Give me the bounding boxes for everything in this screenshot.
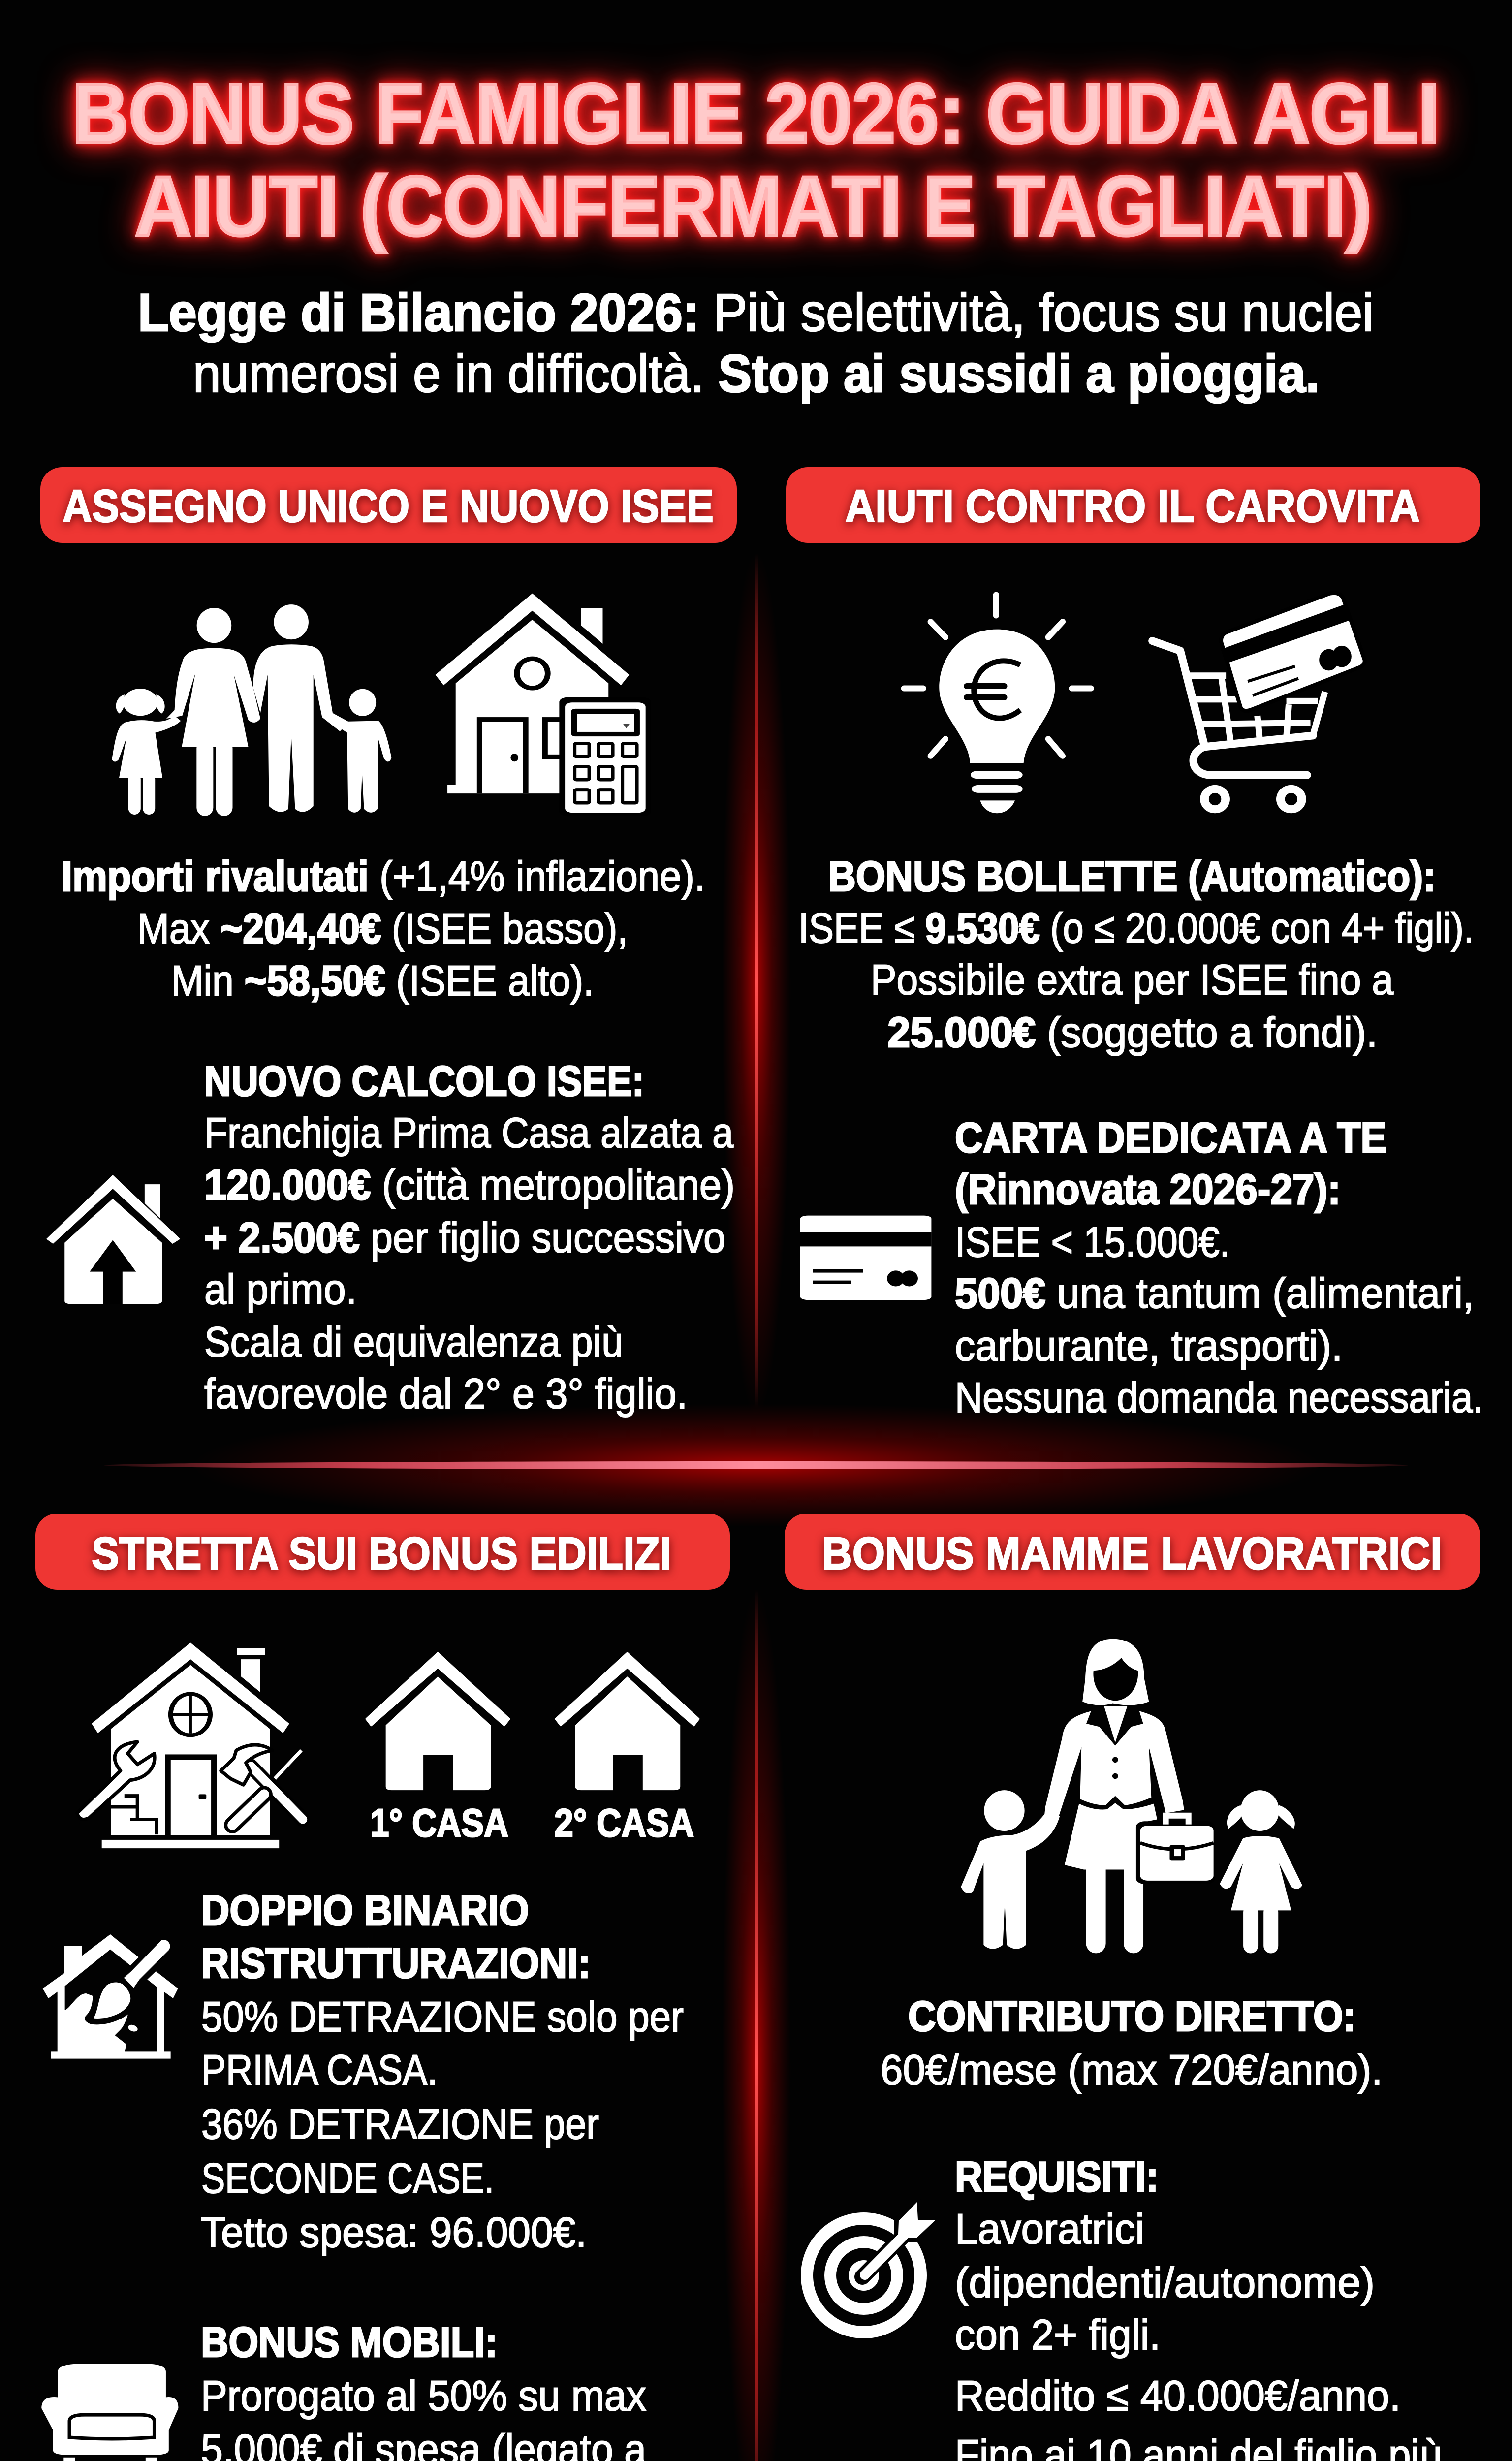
text: doppio binario ristrutturazioni: DOPPIO BINARIO: [201, 1887, 529, 1934]
text: importi rivalutati: Min ~58,50€ (ISEE alto).: [171, 957, 594, 1005]
heading: stretta sui bonus edilizi: STRETTA SUI BONUS EDILIZI: [92, 1528, 671, 1579]
text: contributo diretto: CONTRIBUTO DIRETTO:: [908, 1993, 1356, 2040]
text: bonus bollette: BONUS BOLLETTE (Automatico):: [828, 853, 1436, 900]
text: nuovo calcolo isee: + 2.500€ per figlio successivo: [204, 1214, 725, 1262]
text: bonus mobili: Prorogato al 50% su max: [201, 2372, 646, 2420]
horizontal divider middle: [104, 1404, 1408, 1527]
text: importi rivalutati: Importi rivalutati (+1,4% inflazione).: [62, 853, 705, 900]
text: nuovo calcolo isee: 120.000€ (città metropolitane): [204, 1162, 735, 1209]
text: contributo diretto: [881, 1993, 1383, 2094]
text: carta dedicata a te: CARTA DEDICATA A TE: [955, 1114, 1386, 1162]
vertical divider bottom: [722, 1590, 791, 2461]
text: requisiti: REQUISITI:: [955, 2153, 1159, 2201]
heading: assegno unico: [40, 467, 737, 543]
icon: payment card: [800, 1216, 931, 1300]
icon: house painting: [43, 1934, 178, 2059]
subtitle: numerosi e in difficoltà. Stop ai sussidi a pioggia.: [193, 344, 1320, 403]
text: nuovo calcolo isee: NUOVO CALCOLO ISEE:: [204, 1058, 644, 1105]
text: importi rivalutati: [62, 853, 705, 1005]
text: importi rivalutati: Max ~204,40€ (ISEE basso),: [137, 905, 628, 952]
text: nuovo calcolo isee: al primo.: [204, 1266, 357, 1313]
text: doppio binario ristrutturazioni: SECONDE CASE.: [201, 2155, 494, 2202]
text: nuovo calcolo isee: [204, 1058, 735, 1418]
icon: second home: [556, 1653, 698, 1790]
text: bonus mobili: BONUS MOBILI:: [201, 2319, 498, 2366]
title: AIUTI (CONFERMATI E TAGLIATI): [135, 159, 1372, 253]
label: 2° casa: 2° CASA: [554, 1801, 694, 1845]
subtitle: [138, 283, 1374, 403]
text: bonus mobili: [201, 2319, 724, 2461]
text: bonus bollette: ISEE ≤ 9.530€ (o ≤ 20.000€ con 4+ figli).: [798, 905, 1474, 952]
text: carta dedicata a te: carburante, trasporti).: [955, 1323, 1343, 1370]
vertical divider top: [722, 551, 791, 1418]
text: requisiti: [955, 2153, 1442, 2461]
heading: aiuti contro il carovita: [786, 467, 1480, 543]
icon: first home: [366, 1653, 509, 1790]
text: bonus bollette: 25.000€ (soggetto a fondi).: [887, 1009, 1378, 1056]
text: doppio binario ristrutturazioni: PRIMA CASA.: [201, 2047, 438, 2094]
panel: aiuti contro il carovita: [786, 467, 1483, 1421]
icon: shopping cart with card: [1152, 593, 1365, 813]
heading: assegno unico: ASSEGNO UNICO E NUOVO ISEE: [63, 480, 714, 532]
icon: light bulb with euro: [904, 595, 1091, 813]
text: contributo diretto: 60€/mese (max 720€/anno).: [881, 2047, 1383, 2094]
heading: bonus mamme lavoratrici: BONUS MAMME LAVORATRICI: [822, 1528, 1442, 1579]
icon: house with calculator: [436, 594, 651, 816]
heading: stretta sui bonus edilizi: [35, 1514, 730, 1590]
icon: renovation house with tools: [77, 1642, 303, 1848]
text: requisiti: Reddito ≤ 40.000€/anno.: [955, 2372, 1401, 2420]
panel: stretta sui bonus edilizi: [35, 1514, 730, 2461]
subtitle: Legge di Bilancio 2026: Più selettività, focus su nuclei: [138, 283, 1374, 342]
panel: bonus mamme lavoratrici: [785, 1514, 1480, 2461]
text: carta dedicata a te: [955, 1114, 1483, 1421]
text: nuovo calcolo isee: Franchigia Prima Casa alzata a: [204, 1109, 733, 1157]
text: doppio binario ristrutturazioni: 50% DETRAZIONE solo per: [201, 1993, 684, 2041]
icon: home with arrow: [46, 1175, 180, 1304]
icon: armchair: [41, 2364, 178, 2461]
panel: assegno unico e nuovo isee: [40, 467, 737, 1418]
text: requisiti: Lavoratrici: [955, 2206, 1144, 2253]
text: doppio binario ristrutturazioni: 36% DETRAZIONE per: [201, 2101, 599, 2148]
text: carta dedicata a te: 500€ una tantum (alimentari,: [955, 1270, 1474, 1317]
text: requisiti: (dipendenti/autonome): [955, 2259, 1375, 2306]
title: [72, 66, 1440, 253]
text: nuovo calcolo isee: Scala di equivalenza più: [204, 1319, 623, 1366]
text: doppio binario ristrutturazioni: [201, 1887, 684, 2256]
text: nuovo calcolo isee: favorevole dal 2° e 3° figlio.: [204, 1370, 688, 1418]
text: bonus bollette: [798, 853, 1474, 1056]
text: carta dedicata a te: (Rinnovata 2026-27):: [955, 1166, 1341, 1213]
heading: aiuti contro il carovita: AIUTI CONTRO IL CAROVITA: [845, 480, 1420, 532]
text: requisiti: con 2+ figli.: [955, 2311, 1161, 2359]
text: doppio binario ristrutturazioni: RISTRUTTURAZIONI:: [201, 1940, 591, 1987]
text: doppio binario ristrutturazioni: Tetto spesa: 96.000€.: [201, 2209, 587, 2256]
icon: family: [112, 604, 391, 813]
label: 1° casa: 1° CASA: [370, 1801, 508, 1845]
text: bonus bollette: Possibile extra per ISEE fino a: [871, 956, 1393, 1004]
icon: working mother with children: [961, 1639, 1302, 1949]
text: carta dedicata a te: ISEE < 15.000€.: [955, 1219, 1230, 1266]
heading: bonus mamme lavoratrici: [785, 1514, 1480, 1590]
icon: target with arrow: [801, 2202, 935, 2338]
